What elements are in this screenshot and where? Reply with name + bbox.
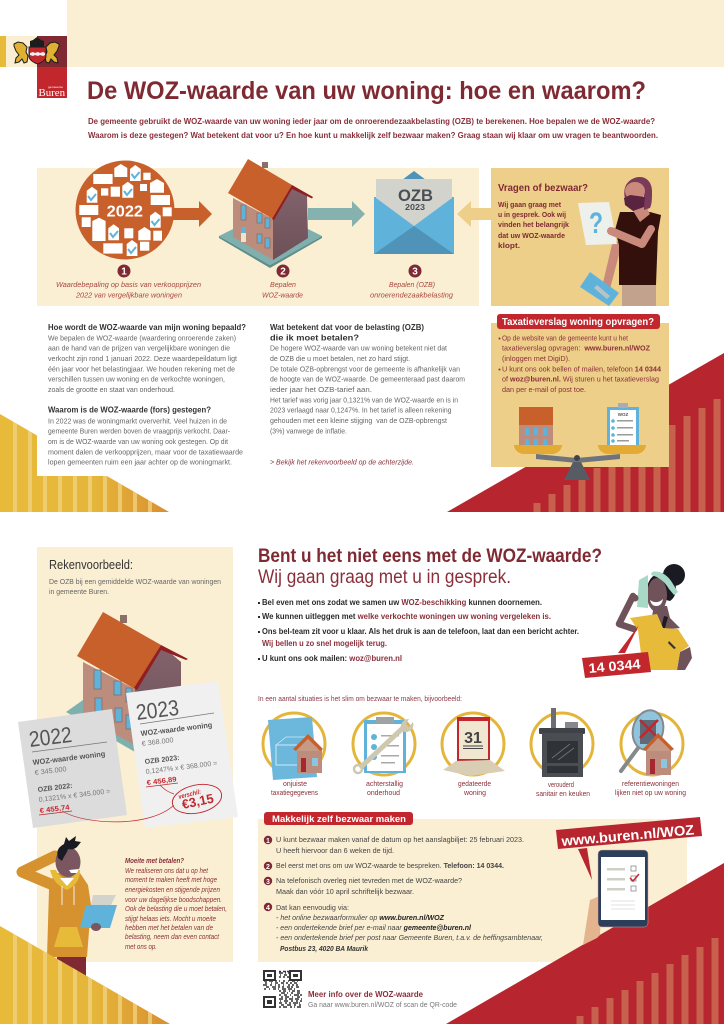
- sheet: 2022: OZB 2022:: [37, 783, 73, 794]
- list: taxatieverslag: dan per e-mail of post toe.: [502, 387, 586, 394]
- arrow: yellow: [457, 201, 491, 227]
- situation: gedateerde woning: 31: [464, 730, 482, 747]
- situation: verouderd sanitair en keuken: verouderd: [548, 780, 574, 789]
- text: moeite met betalen: moment te maken heeft met hoge: [125, 877, 217, 884]
- text: moeite met betalen: Ook de belasting die u moet betalen,: [125, 906, 227, 913]
- text: situaties: In een aantal situaties is het slim om bezwaar te maken, bijvoorbeeld:: [258, 696, 462, 703]
- paragraph: hoe wordt: [48, 335, 237, 394]
- heading: belasting: die ik moet betalen?: [270, 333, 359, 342]
- icon: worried man with tablet: [22, 836, 117, 979]
- heading: bent u het niet eens: Bent u het niet eens met de WOZ-waarde?: [258, 546, 602, 567]
- heading: vragen: Vragen of bezwaar?: [498, 183, 588, 194]
- icon: man with question sheet: ?: [589, 207, 603, 240]
- step 2: 2: [266, 864, 270, 871]
- text: meer info: Ga naar www.buren.nl/WOZ of scan de QR-code: [308, 1000, 457, 1009]
- sheet: 2023: [126, 681, 238, 828]
- step 1: U heeft hiervoor dan 6 weken de tijd.: [276, 846, 394, 855]
- list: gesprek: Ons bel-team zit voor u klaar. Als het druk is aan de telefoon, laat dan een bericht achter.: [262, 627, 579, 636]
- situation: onjuiste taxatiegegevens: onjuiste: [283, 779, 307, 788]
- list: taxatieverslag: U kunt ons ook bellen of mailen, telefoon 14 0344: [502, 367, 661, 374]
- step 3: [264, 876, 462, 896]
- icon: circle of houses 2022: 2022: [107, 204, 143, 221]
- paragraph: hoe wordt: één jaar voor het belastingjaar. We houden rekening met de: [48, 366, 235, 373]
- heading: waarom: Waarom is de WOZ-waarde (fors) gestegen?: [48, 406, 211, 415]
- icon: isometric house: [219, 159, 322, 268]
- heading pill: Taxatieverslag woning opvragen?: [502, 317, 654, 328]
- situation: achterstallig onderhoud: achterstallig: [366, 779, 403, 788]
- text: moeite met betalen: We realiseren ons dat u op het: [125, 868, 209, 875]
- list: taxatieverslag: of woz@buren.nl. Wij sturen u het taxatieverslag: [502, 377, 659, 384]
- step 4: [264, 903, 543, 953]
- icon: woman on phone: 14 0344: [588, 656, 642, 676]
- icon: circle of houses 2022: [76, 160, 174, 260]
- step 2: Bepalen: [270, 282, 296, 289]
- step 3: onroerendezaakbelasting: [370, 292, 453, 300]
- text: vragen: Wij gaan graag met: [498, 202, 562, 209]
- text: moeite met betalen: energiekosten en stijgende prijzen: [125, 887, 220, 894]
- text: vragen: [498, 202, 569, 250]
- text: moeite met betalen: [125, 858, 227, 951]
- paragraph: hoe wordt: verschillen tussen uw woning en de verkochte woningen,: [48, 377, 225, 384]
- paragraph: belasting: ieder jaar het OZB-tarief aan.: [270, 387, 372, 394]
- sheet: 2022: € 345.000: [34, 766, 67, 777]
- paragraph: hoe wordt: We bepalen de WOZ-waarde (waardering onroerende zaken): [48, 335, 236, 342]
- heading: belasting: Wat betekent dat voor de belasting (OZB): [270, 323, 424, 332]
- logo: gemeente Buren: gemeente: [48, 85, 63, 89]
- text: vragen: dat uw WOZ-waarde: [498, 233, 565, 240]
- step 1: 1: [266, 838, 270, 845]
- step 3: [370, 264, 453, 300]
- step 1: U kunt bezwaar maken vanaf de datum op het aanslagbiljet: 25 februari 2023.: [276, 835, 524, 844]
- yellow corner: page 1: [0, 414, 169, 512]
- sheet: 2023: 2023: [135, 695, 180, 725]
- QR code: [263, 970, 302, 1008]
- paragraph: waarom: moment dalen de verkoopprijzen, maar voor de taxatiewaarde: [48, 449, 243, 456]
- heading: belasting: [270, 323, 424, 342]
- icon: balance scale with house and form: [514, 403, 646, 480]
- step 3: 3: [412, 266, 418, 278]
- situation: referentiewoningen: referentiewoningen: [622, 779, 679, 788]
- text: moeite met betalen: hebben met het betalen van de: [125, 925, 213, 932]
- text: rekenvoorbeeld: De OZB bij een gemiddelde WOZ-waarde van woningen: [49, 577, 221, 586]
- sheet: 2023: € 368.000: [141, 737, 174, 748]
- heading: bent u het niet eens: Wij gaan graag met u in gesprek.: [258, 567, 511, 588]
- top header band: [67, 0, 724, 67]
- step 2: 2: [280, 266, 286, 278]
- callout: verschil: €3,15: [181, 791, 215, 812]
- text: moeite met betalen: met ons op.: [125, 944, 157, 951]
- paragraph: waarom: lopen gemeenten ruim een jaar achter op de woningmarkt.: [48, 460, 232, 467]
- list: gesprek: Wij bellen u zo snel mogelijk terug.: [262, 639, 387, 648]
- text: rekenvoorbeeld: [49, 577, 221, 596]
- icon: OZB envelope: OZB: [398, 186, 433, 205]
- callout: verschil: verschil:: [178, 789, 202, 801]
- situation: referentiewoningen: lijken niet op uw woning: [615, 788, 686, 797]
- sheet: 2022: 0,1321% x € 345.000 =: [38, 788, 111, 804]
- step 1: 2022 van vergelijkbare woningen: [75, 292, 182, 300]
- sheet: 2022: WOZ-waarde woning: [32, 749, 106, 767]
- paragraph: waarom: [48, 418, 243, 467]
- list: gesprek: We kunnen uitleggen met welke verkochte woningen uw woning vergeleken is.: [262, 612, 551, 621]
- paragraph: belasting: [270, 346, 465, 435]
- icon: OZB envelope: [374, 171, 454, 254]
- step 4: - een ondertekende brief per post naar Gemeente Buren, t.a.v. de heffingsambtenaar,: [276, 933, 543, 942]
- paragraph: waarom: gemeente Buren werden boven de vraagprijs verkocht. Daar-: [48, 429, 231, 436]
- list: taxatieverslag: Op de website van de gemeente kunt u het: [502, 336, 628, 343]
- sheet: 2023: 0,1247% x € 368.000 =: [145, 760, 218, 776]
- arrow: orange: [173, 201, 212, 227]
- link: rekenvoorbeeld: > Bekijk het rekenvoorbeeld op de achterzijde.: [270, 460, 414, 467]
- step 4: 4: [266, 905, 270, 912]
- step 3: Na telefonisch overleg niet tevreden met de WOZ-waarde?: [276, 876, 462, 885]
- situation: onjuiste taxatiegegevens: taxatiegegevens: [271, 788, 318, 797]
- icon: balance scale with house and form: WOZ: [618, 412, 628, 417]
- text: meer info: [308, 989, 457, 1009]
- heading pill: Makkelijk zelf bezwaar maken: [272, 814, 406, 824]
- text: meer info: Meer info over de WOZ-waarde: [308, 989, 423, 999]
- step 4: Postbus 23, 4020 BA Maurik: [280, 944, 369, 953]
- paragraph: hoe wordt: verkocht zijn rond 1 januari 2022. Deze waardepeildatum ligt: [48, 356, 237, 363]
- paragraph: belasting: (3%) vanwege de inflatie.: [270, 428, 347, 435]
- text: vragen: u in gesprek. Ook wij: [498, 212, 566, 219]
- red corner: page 1: [447, 353, 724, 512]
- list: gesprek: U kunt ons ook mailen: woz@buren.nl: [262, 654, 402, 663]
- icon: hand with tablet and url label: www.buren.nl/WOZ: [560, 821, 695, 849]
- title: De WOZ-waarde van uw woning: hoe en waarom?: [87, 77, 646, 105]
- step 1: [56, 264, 201, 300]
- text: moeite met betalen: stijgt helaas iets. Mocht u moeite: [125, 916, 216, 923]
- text: moeite met betalen: voor uw dagelijkse boodschappen.: [125, 897, 222, 904]
- icon: house: [66, 612, 200, 752]
- icon: woman on phone: [582, 564, 692, 678]
- column 2 text: [270, 323, 465, 467]
- sheet: 2022: € 455,74: [39, 804, 70, 815]
- intro text: [88, 116, 658, 140]
- paragraph: hoe wordt: zoals de grootte en staat van onderhoud.: [48, 387, 175, 394]
- step 4: Dat kan eenvoudig via:: [276, 903, 349, 912]
- arrow: teal: [308, 201, 365, 227]
- paragraph: belasting: Het tarief was vorig jaar 0,1321% van de WOZ-waarde en is in: [270, 397, 458, 404]
- paragraph: belasting: de OZB die u moet betalen, net zo hard stijgt.: [270, 356, 410, 363]
- situation: referentiewoningen: [615, 706, 686, 797]
- step 1: 1: [121, 266, 127, 278]
- logo: gemeente Buren: Buren: [38, 88, 66, 99]
- sheet: 2023: OZB 2023:: [144, 755, 180, 766]
- callout: verschil: [62, 780, 224, 822]
- panel: makkelijk zelf bezwaar maken: [258, 812, 687, 962]
- paragraph: hoe wordt: aan de hand van de prijzen van vergelijkbare woningen die: [48, 346, 230, 353]
- list: taxatieverslag: [498, 336, 661, 394]
- yellow corner: page 2: [0, 926, 170, 1024]
- icon: OZB envelope: 2023: [405, 203, 426, 212]
- sheet: 2023: WOZ-waarde woning: [140, 720, 213, 738]
- icon: hand with tablet and url label: [556, 817, 702, 945]
- list: taxatieverslag: taxatieverslag opvragen: www.buren.nl/WOZ: [502, 346, 651, 353]
- step 2: Bel eerst met ons om uw WOZ-waarde te bespreken. Telefoon: 14 0344.: [276, 861, 504, 870]
- situation: verouderd sanitair en keuken: sanitair en keuken: [536, 789, 590, 798]
- paragraph: waarom: om is de WOZ-waarde van uw woning ook gestegen. Op dit: [48, 439, 228, 446]
- step 2: [262, 264, 303, 300]
- situation: gedateerde woning: [442, 713, 505, 797]
- paragraph: belasting: gehouden met een kleine stijging van de OZB-opbrengst: [270, 418, 447, 425]
- step 1: [264, 835, 524, 855]
- sheet: 2023: € 456,89: [146, 776, 177, 787]
- heading: bent u het niet eens: [258, 546, 602, 588]
- text: vragen: vinden het belangrijk: [498, 222, 569, 229]
- paragraph: belasting: De totale OZB-opbrengst voor de gemeente is afhankelijk van: [270, 366, 460, 373]
- step 4: - het online bezwaarformulier op www.buren.nl/WOZ: [276, 913, 445, 922]
- text: moeite met betalen: Moeite met betalen?: [125, 858, 185, 865]
- list: gesprek: Bel even met ons zodat we samen uw WOZ-beschikking kunnen doornemen.: [262, 598, 542, 607]
- logo: gemeente Buren: [0, 36, 67, 99]
- paragraph: belasting: De hogere WOZ-waarde van uw woning betekent niet dat: [270, 346, 447, 353]
- panel: vragen of bezwaar: [457, 168, 669, 306]
- situation: verouderd sanitair en keuken: [531, 708, 593, 798]
- situation: achterstallig onderhoud: [353, 713, 415, 797]
- step 1: Waardebepaling op basis van verkoopprijzen: [56, 282, 201, 289]
- panel: rekenvoorbeeld: [18, 547, 238, 979]
- panel: taxatieverslag: [491, 314, 669, 480]
- list: gesprek: [258, 598, 579, 663]
- paragraph: waarom: In 2022 was de woningmarkt oververhit. Veel huizen in de: [48, 418, 227, 425]
- intro text: De gemeente gebruikt de WOZ-waarde van uw woning ieder jaar om de onroerendezaakbelasting (OZB) te berekenen. Hoe bepalen we de WOZ-waarde?: [88, 116, 655, 126]
- text: vragen: klopt.: [498, 243, 520, 250]
- paragraph: belasting: 2023 verlaagd naar 0,1247%. In het tarief is alleen rekening: [270, 408, 452, 415]
- step 4: - een ondertekende brief per e-mail naar gemeente@buren.nl: [276, 923, 472, 932]
- step 2: WOZ-waarde: [262, 292, 303, 300]
- sheet: 2022: 2022: [28, 722, 73, 752]
- panel: process steps: [37, 159, 479, 306]
- icon: man with question sheet: [578, 177, 661, 306]
- intro text: Waarom is deze gestegen? Wat betekent dat voor u? En hoe kunt u makkelijk zelf bezwaar maken? Graag staan wij klaar om uw vragen te beantwoorden.: [88, 130, 658, 140]
- sheet: 2022: [18, 709, 127, 828]
- step 3: Bepalen (OZB): [389, 282, 435, 289]
- situation: gedateerde woning: gedateerde: [458, 779, 491, 788]
- paragraph: belasting: de hoogte van de WOZ-waarde. De gemeenteraad past daarom: [270, 377, 465, 384]
- heading: hoe wordt: Hoe wordt de WOZ-waarde van mijn woning bepaald?: [48, 323, 246, 332]
- red corner: page 2: [446, 863, 724, 1024]
- heading: rekenvoorbeeld: Rekenvoorbeeld:: [49, 558, 133, 572]
- heading pill: [264, 812, 413, 825]
- list: taxatieverslag: (inloggen met DigiD).: [502, 356, 570, 363]
- step 3: 3: [266, 879, 270, 886]
- situation: achterstallig onderhoud: onderhoud: [367, 788, 400, 797]
- text: moeite met betalen: belasting, neem dan even contact: [125, 934, 220, 941]
- situation: onjuiste taxatiegegevens: [263, 713, 325, 797]
- column 1 text: [48, 323, 246, 467]
- text: rekenvoorbeeld: in gemeente Buren.: [49, 587, 109, 596]
- step 3: Maak dan vóór 10 april schriftelijk bezwaar.: [276, 887, 414, 896]
- situation: gedateerde woning: woning: [463, 788, 486, 797]
